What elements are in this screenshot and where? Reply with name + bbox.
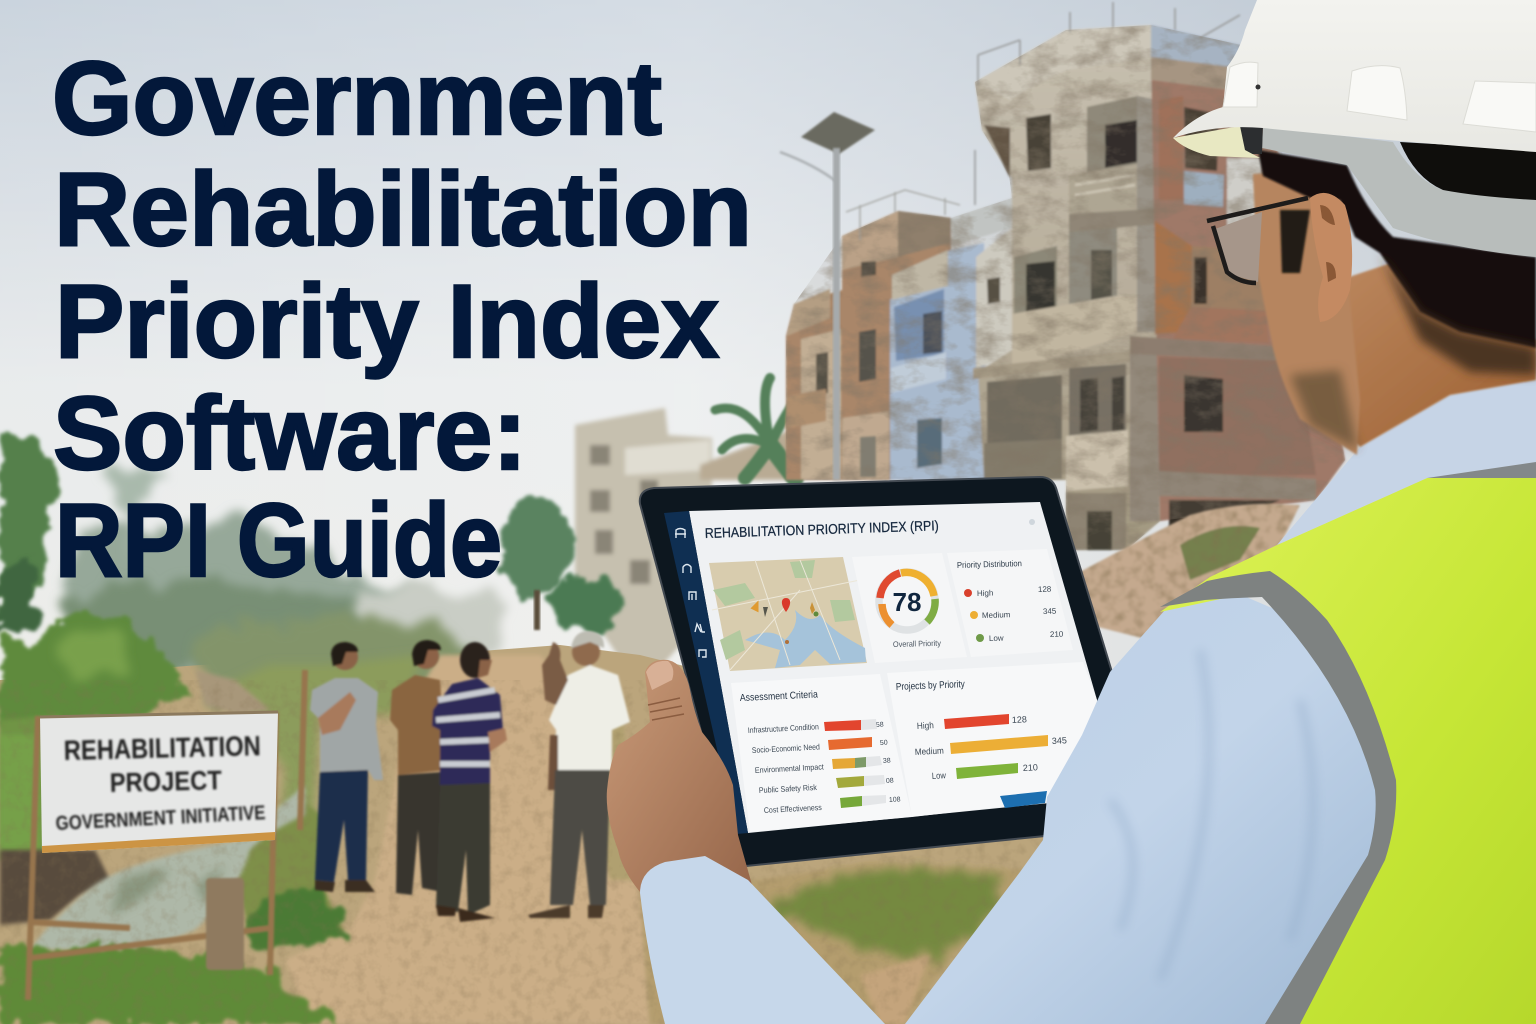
right grass patch <box>640 862 1030 1024</box>
damaged building <box>785 2 1345 550</box>
sign text: REHABILITATION <box>63 730 261 766</box>
assessment criteria card: 50 <box>880 740 888 747</box>
sign board <box>40 712 278 853</box>
title: Government <box>52 41 662 157</box>
title: Priority Index <box>55 264 719 380</box>
hat underside band <box>1262 126 1536 257</box>
person: brown shirt <box>390 640 446 895</box>
upper-arm sleeve <box>905 590 1396 1024</box>
collar seam <box>1427 462 1536 478</box>
sleeve fold shadow <box>1110 650 1313 980</box>
priority distribution card: 210 <box>1050 630 1064 639</box>
rubble pile <box>1080 500 1305 645</box>
roof railings <box>975 2 1240 205</box>
tablet <box>640 477 1120 866</box>
screen <box>689 502 1120 833</box>
priority distribution card: High <box>977 589 994 598</box>
white hard hat <box>1173 0 1536 257</box>
solar street lamp panel <box>780 112 875 182</box>
palm and thumb <box>607 660 752 892</box>
ear <box>1310 193 1352 322</box>
map pins <box>782 598 790 612</box>
map <box>709 557 867 671</box>
person: striped shirt <box>432 642 507 922</box>
palm tree <box>715 378 800 478</box>
green slope behind group <box>215 655 420 860</box>
dirt path <box>285 655 650 1024</box>
sign posts and rails <box>28 670 305 1000</box>
sidebar <box>664 511 748 834</box>
priority distribution card <box>947 549 1073 657</box>
right roadside scrub <box>560 690 640 880</box>
hat clip <box>1240 122 1263 154</box>
thumbnail <box>646 661 673 690</box>
gauge card <box>852 553 967 663</box>
site workers group <box>310 631 630 922</box>
trees mid-distance <box>501 378 800 632</box>
face <box>1253 170 1360 455</box>
knuckle creases <box>648 698 684 720</box>
green bank beside stream <box>235 800 345 945</box>
tablet body <box>640 477 1120 866</box>
sign bottom strip <box>42 832 275 853</box>
stream <box>30 785 305 950</box>
street lamp pole <box>833 148 840 480</box>
beard shadow <box>1290 370 1358 450</box>
sideburn <box>1280 210 1310 273</box>
foliage bush <box>0 612 185 735</box>
roadside shrub <box>245 889 346 946</box>
title: RPI Guide <box>55 483 502 599</box>
person: white shirt and cap <box>528 631 630 918</box>
distant hazy treeline <box>0 429 505 700</box>
worker figure <box>905 0 1536 1024</box>
left green bank <box>0 715 60 860</box>
projects by priority chart: 128 <box>1012 714 1027 725</box>
person: distant <box>542 642 568 705</box>
gauge caption: Overall Priority <box>893 639 941 649</box>
assessment criteria card <box>731 674 912 832</box>
hat ribs <box>1223 62 1536 132</box>
assessment criteria card: Socio-Economic Need <box>752 742 820 755</box>
shirt cuff and forearm <box>640 856 885 1024</box>
sign text <box>55 730 266 835</box>
assessment criteria card: Public Safety Risk <box>759 783 818 795</box>
lower-left foreground grass <box>0 945 340 1024</box>
projects by priority chart: Medium <box>915 745 944 757</box>
projects by priority chart: High <box>917 720 934 731</box>
neck <box>1310 260 1536 447</box>
projects by priority chart: 345 <box>1052 735 1067 746</box>
holding hand <box>607 660 752 892</box>
reflective strip <box>1160 571 1396 1024</box>
sky background <box>0 0 1536 700</box>
wooden stump <box>206 878 244 970</box>
ground <box>0 612 1100 1024</box>
bush highlights <box>60 630 130 680</box>
glasses <box>1207 198 1308 283</box>
hazy band behind group <box>190 620 480 705</box>
main block concrete facade <box>973 25 1184 550</box>
assessment criteria card: 58 <box>876 722 884 729</box>
header status dot <box>1029 519 1035 525</box>
sidebar icons <box>675 528 706 657</box>
projects by priority chart: Low <box>932 770 947 781</box>
neck hair shade <box>1380 253 1536 375</box>
assessment criteria card: 38 <box>883 758 891 765</box>
title: Software: <box>53 376 527 492</box>
brim underside <box>1173 126 1260 158</box>
assessment criteria card: 08 <box>886 778 894 785</box>
dirt roots under sign <box>0 850 110 925</box>
sign text: PROJECT <box>109 765 223 798</box>
dirt bank <box>195 670 270 715</box>
person: grey shirt <box>310 642 383 892</box>
signboard <box>28 670 305 1000</box>
water reflections <box>110 865 225 915</box>
hair <box>1258 150 1536 348</box>
assessment criteria card: Assessment Criteria <box>740 689 818 704</box>
priority distribution card: 345 <box>1043 607 1057 616</box>
assessment criteria card: 108 <box>889 796 901 804</box>
assessment criteria card: Environmental Impact <box>755 762 825 775</box>
title <box>52 41 752 599</box>
priority distribution card: Low <box>989 634 1004 643</box>
assessment criteria card: Infrastructure Condition <box>748 722 819 735</box>
sign text: GOVERNMENT INITIATIVE <box>55 802 266 835</box>
blue plastered block <box>890 198 1012 480</box>
hat inner shadow <box>1400 142 1536 200</box>
ear inner shade <box>1320 205 1336 282</box>
priority distribution card: 128 <box>1038 585 1052 594</box>
priority gauge <box>879 572 935 630</box>
left brick block <box>785 190 960 480</box>
title: Rehabilitation <box>54 152 752 268</box>
hat dome <box>1173 0 1536 152</box>
priority distribution card: Priority Distribution <box>957 558 1022 570</box>
high-vis vest <box>1160 478 1536 1024</box>
grime texture on building <box>780 20 1350 560</box>
collar <box>1277 380 1536 545</box>
projects by priority chart: 210 <box>1023 762 1038 773</box>
main block rear brick <box>1130 25 1345 540</box>
assessment criteria card: Cost Effectiveness <box>764 803 822 815</box>
dashboard title: REHABILITATION PRIORITY INDEX (RPI) <box>705 517 939 541</box>
projects by priority chart <box>887 662 1097 817</box>
head skin <box>1253 170 1536 455</box>
projects by priority chart: Projects by Priority <box>896 679 965 693</box>
priority distribution card: Medium <box>982 610 1011 620</box>
gauge value: 78 <box>893 587 921 617</box>
distant buildings <box>575 408 795 690</box>
